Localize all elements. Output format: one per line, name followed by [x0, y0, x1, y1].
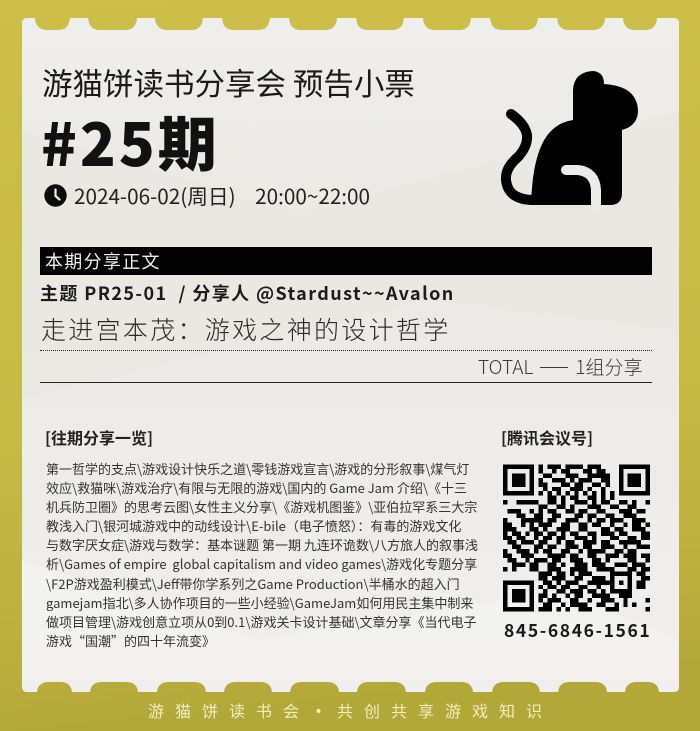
past sessions list: gamejam指北\多人协作项目的一些小经验\GameJam如何用民主集中制来: [46, 593, 473, 612]
footer slogan: 游猫饼读书会 共创共享游戏知识: [148, 698, 553, 722]
heading: past sessions: [往期分享一览]: [45, 425, 153, 449]
icon: cat silhouette: [500, 71, 638, 205]
panel: current session: [40, 247, 652, 383]
total count: TOTAL 1组分享: [478, 353, 643, 380]
past sessions list: 与数字厌女症\游戏与数学：基本谜题 第一期 九连环诡数\八方旅人的叙事浅: [46, 535, 478, 554]
dotted divider: [40, 350, 652, 351]
solid divider: [40, 382, 652, 383]
meeting number: 845-6846-1561: [504, 618, 651, 643]
title: 游猫饼读书分享会 预告小票: [42, 60, 415, 104]
past sessions list: [46, 459, 478, 650]
past sessions list: 析\Games of empire global capitalism and video games\游戏化专题分享: [46, 554, 477, 573]
past sessions list: 教浅入门\银河城游戏中的动线设计\E-bile（电子愤怒）：有毒的游戏文化: [46, 516, 461, 535]
speaker line: 主题 PR25-01 / 分享人 @Stardust~~Avalon: [40, 280, 455, 306]
icon: clock: [44, 184, 67, 207]
past sessions list: 效应\救猫咪\游戏治疗\有限与无限的游戏\国内的 Game Jam 介绍\《十三: [46, 478, 467, 497]
section header bar: 本期分享正文: [45, 248, 161, 274]
past sessions list: \F2P游戏盈利模式\Jeff带你学系列之Game Production\半桶水的超入门: [46, 574, 460, 593]
past sessions list: 第一哲学的支点\游戏设计快乐之道\零钱游戏宣言\游戏的分形叙事\煤气灯: [46, 459, 469, 478]
past sessions list: 机兵防卫圈》的思考云图\女性主义分享\《游戏机图鉴》\亚伯拉罕系三大宗: [46, 497, 477, 516]
past sessions list: 做项目管理\游戏创意立项从0到0.1\游戏关卡设计基础\文章分享《当代电子: [46, 612, 477, 631]
footer slogan: ·: [310, 698, 327, 722]
talk title: 走进宫本茂：游戏之神的设计哲学: [41, 311, 451, 347]
section header bar: [40, 247, 652, 275]
past sessions list: 游戏“国潮”的四十年流变》: [46, 631, 215, 650]
issue number: #25期: [41, 98, 220, 183]
heading: Tencent meeting number: [腾讯会议号]: [501, 425, 593, 449]
date and time: 2024-06-02(周日) 20:00~22:00: [74, 180, 370, 210]
QR code: [503, 464, 650, 612]
